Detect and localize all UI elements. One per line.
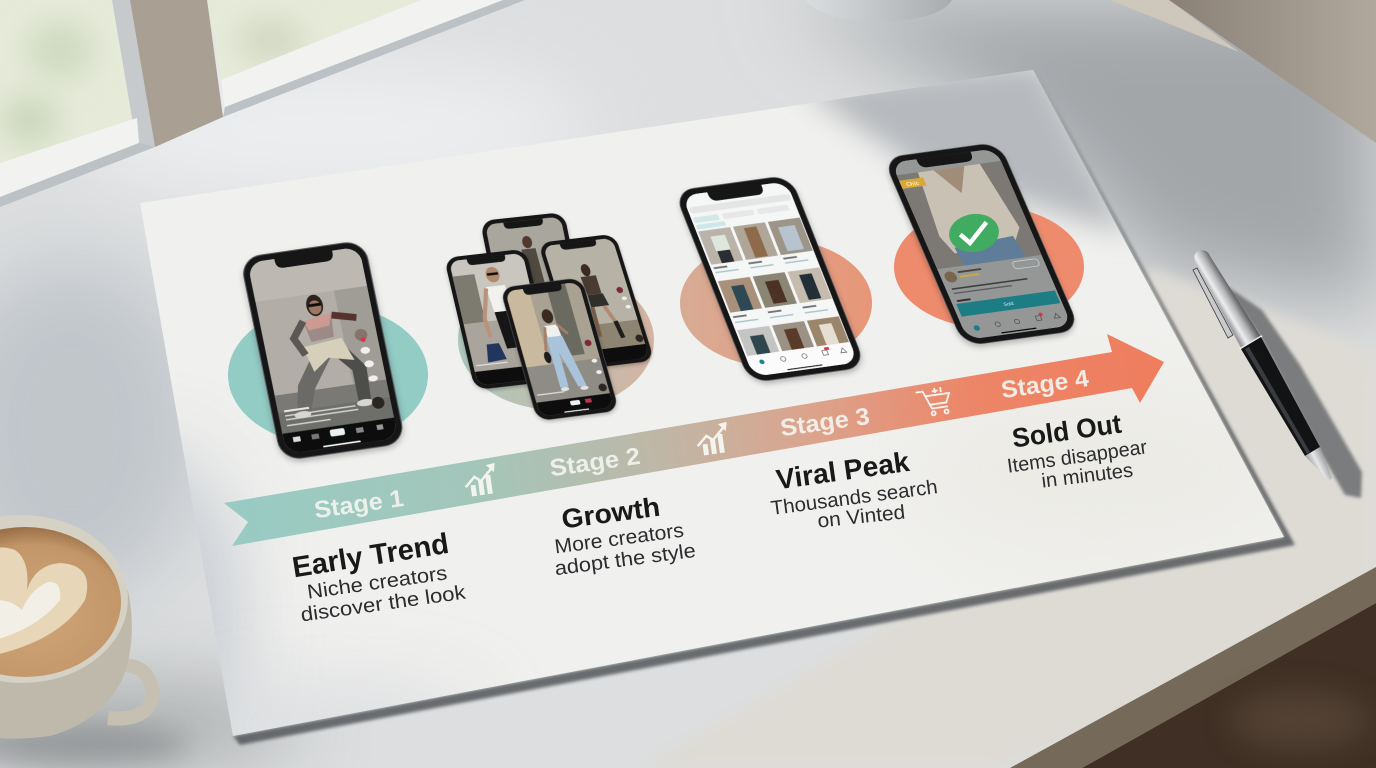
- coffee cup: [0, 515, 190, 765]
- handle: [108, 665, 153, 719]
- pen: [1193, 250, 1362, 498]
- phone: front: [500, 277, 619, 421]
- teal-to-tan circle: [458, 270, 654, 410]
- phone: sold listing: Sold: [940, 160, 953, 167]
- description: discover the look: [299, 581, 468, 627]
- window sill right: [221, 0, 503, 107]
- description: [299, 562, 468, 627]
- phone: sold listing: [883, 142, 1080, 346]
- icon: growth chart 1: [463, 463, 499, 497]
- background: desk front edge and wood floor: [1010, 567, 1376, 768]
- stage labels: Stage 2: [548, 443, 642, 482]
- description: on Vinted: [816, 501, 906, 533]
- stage labels: Stage 4: [1000, 365, 1091, 404]
- salmon circle: [680, 239, 872, 367]
- heading: Early Trend: [290, 528, 451, 584]
- icon: green check badge: [947, 211, 1001, 255]
- description: adopt the style: [553, 540, 697, 580]
- paper shadow: [233, 72, 1295, 745]
- phone: sold listing: Chic: [905, 181, 921, 188]
- paper sheet: [140, 70, 1284, 736]
- description: Thousands search: [769, 476, 939, 520]
- window: [0, 0, 525, 207]
- pen black barrel: [1241, 337, 1320, 456]
- text block: sold out: [1006, 409, 1149, 493]
- stage labels: Stage 3: [779, 403, 871, 442]
- teal circle: [228, 305, 428, 445]
- window frame post: [130, 0, 223, 147]
- panel: stage 3 phone: [674, 175, 872, 383]
- product thumbnails: [698, 218, 849, 356]
- background: wall, top right: [1110, 0, 1376, 143]
- window panes with blurred garden: [0, 0, 440, 170]
- cup rim: [0, 515, 128, 683]
- phone: Vinted search grid: [674, 175, 866, 383]
- text block: growth: [553, 492, 697, 580]
- coffee surface with latte art: [0, 527, 121, 677]
- stage labels: Stage 1: [313, 485, 405, 524]
- cup body: [0, 590, 132, 739]
- phone: TikTok video: [240, 240, 406, 461]
- pen clip: [1193, 268, 1233, 338]
- panel: stage 2 phones: [444, 212, 654, 421]
- text block: viral peak: [769, 446, 939, 533]
- phone: left: [445, 250, 534, 392]
- pen ring: [1240, 336, 1262, 349]
- icon: growth chart 2: [695, 422, 731, 456]
- stage labels: [313, 365, 1091, 524]
- icon: shopping cart: [915, 386, 952, 417]
- window mullion: [112, 0, 155, 147]
- text block: early trend: [290, 528, 468, 627]
- heading: Growth: [560, 492, 662, 534]
- dancer: [289, 294, 373, 418]
- pen shadow: [1225, 285, 1362, 498]
- description: Items disappear: [1006, 436, 1149, 478]
- phone: right: [538, 234, 654, 370]
- panel: stage 1 phone: [228, 240, 428, 461]
- description: Niche creators: [306, 562, 449, 604]
- coral circle: [894, 206, 1084, 328]
- heading: Sold Out: [1010, 409, 1123, 454]
- pen tip: [1305, 447, 1332, 481]
- window sill left: [0, 118, 139, 197]
- description: [553, 520, 697, 580]
- panel: stage 4 phone: [883, 142, 1084, 346]
- phone: back: [480, 213, 572, 284]
- heading: Viral Peak: [774, 446, 912, 495]
- description: More creators: [553, 520, 685, 558]
- phone: sold listing: Sold: [1003, 301, 1015, 308]
- pen silver barrel: [1194, 250, 1261, 348]
- ribbon arrow timeline: [224, 334, 1164, 546]
- description: in minutes: [1040, 460, 1134, 493]
- mug at top edge: [806, 0, 952, 22]
